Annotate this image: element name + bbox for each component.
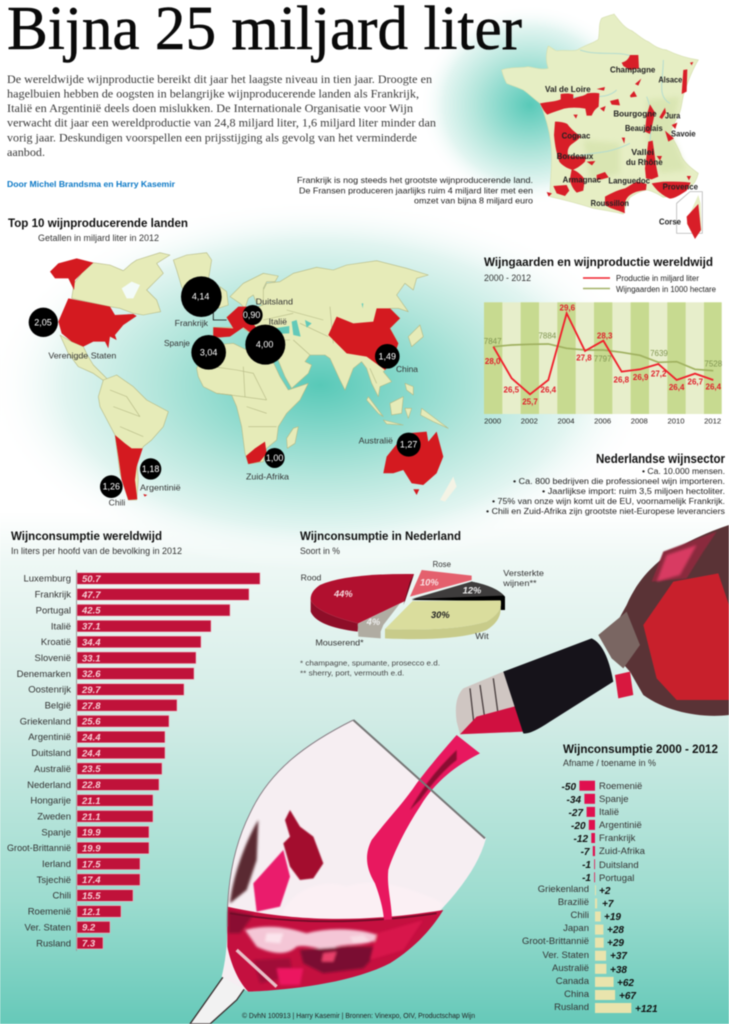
bar chart: world consumption: 47.7 [81,590,101,601]
line chart [484,302,723,425]
bar chart: consumption change: Portugal [599,873,634,884]
intro text: De wereldwijde wijnproductie bereikt dit jaar het laagste niveau in tien jaar. Droogte en [7,73,432,86]
stream [367,735,480,920]
panel: Nederlandse wijnsector: • Chili en Zuid-Afrika zijn grootste niet-Europese leveranciers [486,506,725,516]
panel: Nederlandse wijnsector: • Ca. 10.000 mensen. [642,466,725,476]
heading: line chart [484,255,713,283]
slice labels: Wit [475,631,489,641]
France map glow [420,5,640,205]
bar chart: world consumption: Zweden [37,812,71,822]
bubble: Verenigde Staten: 2,05 [34,317,52,327]
year axis: 2006 [594,416,611,425]
world map glow [0,200,650,570]
bubble: Duitsland [243,305,263,325]
intro text [7,73,436,159]
wine regions [540,55,701,239]
bar chart: consumption change: -27 [569,808,583,819]
foil capsule [503,638,613,733]
bar chart: world consumption: Griekenland [20,716,71,727]
bar chart: world consumption: Oostenrijk [28,685,71,696]
bar chart: world consumption: 42.5 [81,606,101,617]
heading: consumption change: Wijnconsumptie 2000 - 2012 [563,742,718,756]
bar chart: world consumption: 22.8 [81,780,101,791]
highlights [652,532,717,582]
region labels: Alsace [658,75,682,85]
bar chart: world consumption: 17.4 [82,875,101,886]
vineyard values: 7797 [594,354,612,363]
bar chart: world consumption: 17.5 [82,859,101,870]
bar chart: world consumption: 19.9 [82,828,101,839]
region labels: Corse [659,217,681,227]
illustration: wine bottle [456,525,729,734]
bar chart: consumption change: +2 [599,886,611,897]
vineyard values: 7847 [484,337,502,346]
bar chart: world consumption: Tsjechië [37,875,71,886]
bar chart: world consumption: 21.1 [81,812,100,823]
region labels: Roussillon [591,198,629,208]
producer countries [50,258,443,500]
bar chart: consumption change: Argentinië [599,820,642,831]
bar chart: consumption change: +67 [619,991,636,1002]
vineyard values [484,332,723,369]
region labels: Savoie [671,129,696,139]
bar chart: consumption change: -50 [562,782,576,793]
country labels: China [396,364,418,374]
bar chart: world consumption: 27.8 [81,701,101,712]
bar chart: consumption change: +19 [604,912,621,923]
slice: rood [311,574,414,632]
percentages [333,578,482,627]
bar chart: world consumption: Portugal [36,605,71,616]
production values: 26,4 [706,382,722,391]
production values: 28,0 [485,357,501,366]
production values: 28,3 [597,331,613,340]
intro text: vorig jaar. Deskundigen voorspellen een prijsstijging als gevolg van het verminderde [7,131,417,144]
bar chart: consumption change: Duitsland [599,860,639,871]
bar chart: consumption change: Roemenië [599,781,642,792]
bubble: Italië [245,325,285,365]
bar chart: world consumption: 24.4 [81,748,101,759]
bar chart: consumption change: +37 [610,951,627,962]
slice labels: Rood [301,572,322,582]
terrain shading [583,97,687,180]
bubble: China [375,344,400,369]
production values: 27,8 [576,354,592,363]
bar chart: consumption change: -12 [574,834,588,845]
bar chart: world consumption: 33.1 [82,653,100,664]
production values: 26,4 [669,383,685,392]
bar chart: consumption change: Groot-Brittannië [522,936,589,947]
bar chart: consumption change: Japan [563,923,589,934]
region labels: Cognac [562,130,590,140]
footnotes: * champagne, spumante, prosecco e.d. [300,658,440,667]
splash [253,850,290,912]
production line [493,313,713,394]
bar chart: world consumption: 32.6 [82,669,101,680]
bubble: Spanje [191,335,226,370]
region labels: Languedoc [608,176,650,186]
slice: wit [385,600,501,639]
bubble: Australië: 1,27 [400,440,417,450]
bar chart: world consumption: Italië [51,621,71,632]
bowl [222,720,486,992]
region labels: Beaujolais [625,123,663,133]
panel: Nederlandse wijnsector: • Jaarlijkse import: ruim 3,5 miljoen hectoliter. [542,486,725,496]
country labels: Australië [359,435,393,445]
heading: line chart: 2000 - 2012 [484,273,531,283]
France note [297,175,533,206]
bar chart: world consumption: België [45,700,71,712]
bar chart: consumption change: -20 [571,821,586,832]
bar chart: consumption change: +29 [607,938,624,949]
bubble: Chili: 1,26 [103,482,120,492]
country labels: Duitsland [256,296,293,306]
bar chart: consumption change: -1 [582,860,591,871]
bar chart: consumption change: +62 [617,978,634,989]
production values: 26,8 [614,375,630,384]
footnotes: ** sherry, port, vermouth e.d. [300,668,404,677]
bar chart: consumption change: Italië [599,807,619,818]
region labels: Vallei [631,147,654,157]
production values: 29,6 [560,304,576,313]
region labels: Champagne [610,65,655,75]
bar chart: consumption change: Rusland [554,1002,589,1013]
country labels: Zuid-Afrika [246,471,289,481]
line chart legend: Wijngaarden in 1000 hectare [616,285,717,294]
bar chart: world consumption: Duitsland [31,748,71,759]
percentages: 10% [420,578,439,588]
panel: Nederlandse wijnsector [486,452,725,516]
heading: line chart: Wijngaarden en wijnproductie wereldwijd [484,255,713,269]
Corsica inset [677,192,702,233]
bar chart: world consumption: Spanje [41,827,71,838]
land masses [60,253,457,502]
heading: world consumption: Wijnconsumptie wereldwijd [11,529,162,543]
heading: top 10: Getallen in miljard liter in 2012 [38,233,159,243]
heading: consumption change: Afname / toename in % [563,758,656,768]
slice labels: wijnen** [502,578,537,588]
heading: consumption in NL: Wijnconsumptie in Nederland [300,529,461,543]
France outline [502,14,698,214]
country labels: Chili [109,497,125,507]
vineyard values: 7639 [650,349,668,358]
bubble: Australië [397,433,421,457]
production values: 26,4 [541,385,557,394]
bar chart: consumption change [522,781,658,1015]
bubble: Frankrijk: 4,14 [192,291,209,301]
bar chart: world consumption: Ierland [42,859,71,870]
panel: Nederlandse wijnsector: • 75% van onze wijn komt uit de EU, voornamelijk Frankrijk. [492,496,725,506]
region labels: Bourgogne [613,109,657,119]
region labels: Armagnac [563,174,601,184]
country labels: Spanje [164,338,190,348]
France note: De Fransen produceren jaarlijks ruim 4 miljard liter met een [299,185,533,195]
heading: consumption in NL: Soort in % [300,546,340,556]
bar chart: world consumption: Australië [34,764,71,775]
wine [227,810,443,992]
bar chart: consumption change: Zuid-Afrika [599,846,646,857]
production values [485,304,722,406]
bar chart: world consumption: 50.7 [82,574,101,585]
heading: top 10: Top 10 wijnproducerende landen [8,216,188,230]
bar chart: consumption change: Canada [556,976,590,987]
region labels: Val de Loire [545,84,591,94]
stem [190,977,248,1024]
percentages: 4% [366,617,381,627]
country labels: Verenigde Staten [48,351,117,361]
bar chart: world consumption: Chili [53,891,71,902]
country labels: Argentinië [140,483,181,493]
bar chart: consumption change: -1 [582,873,591,884]
interior borders [110,307,377,437]
bar chart: world consumption: Ver. Staten [25,922,71,933]
bubble: Duitsland: 0,90 [243,310,260,320]
bubble: Spanje: 3,04 [200,347,217,357]
year axis: 2012 [704,416,721,425]
bar chart: world consumption: Denemarken [17,669,71,680]
credit line: © DvhN 100913 | Harry Kasemir | Bronnen: Vinexpo, OIV, Productschap Wijn [242,1011,475,1020]
region labels: Bordeaux [557,151,593,161]
seas [274,303,363,337]
intro text: hagelbuien hebben de oogsten in belangrijke wijnproducerende landen als Frankrijk, [7,88,419,101]
bar chart: world consumption: 15.5 [82,891,101,902]
bar chart: world consumption: 12.1 [82,907,100,918]
line chart legend: Productie in miljard liter [616,274,699,283]
production values: 25,7 [522,397,538,406]
heading: consumption in NL [300,529,461,556]
bubble: Verenigde Staten [29,308,58,337]
bar chart: world consumption: 24.4 [81,732,101,744]
slice: mouserend [358,603,400,638]
vineyard values: 7884 [538,332,557,341]
percentages: 44% [333,589,353,599]
slice: versterkte wijnen [412,582,505,610]
bar chart: world consumption: 29.7 [81,685,101,696]
wine in neck [615,672,633,698]
byline: Door Michel Brandsma en Harry Kasemir [7,179,176,189]
year axis: 2004 [557,416,575,425]
bar chart: world consumption: 19.9 [82,844,101,854]
region labels: Provence [663,182,698,192]
panel: Nederlandse wijnsector: • Ca. 800 bedrijven die professioneel wijn importeren. [513,476,725,486]
bar chart: consumption change: Ver. Staten [543,950,589,961]
heading: top 10 [8,216,188,243]
year axis: 2010 [667,416,685,425]
bubble: Argentinië: 1,18 [142,464,159,474]
neck glass [598,612,640,668]
France note: Frankrijk is nog steeds het grootste wijnproducerende land. [297,175,533,185]
heading: world consumption: In liters per hoofd van de bevolking in 2012 [11,546,182,556]
year axis [484,416,721,425]
bar chart: consumption change: Frankrijk [599,833,636,844]
production values: 26,7 [688,378,704,387]
bar chart: world consumption: Hongarije [30,796,71,807]
bar chart: world consumption: Nederland [27,780,71,791]
region labels: Jura [665,110,680,120]
Hudson Bay [122,282,140,298]
bottle body [610,525,729,716]
bar chart: world consumption: 37.1 [82,622,100,633]
pie chart: NL consumption [300,559,544,677]
bar chart: world consumption: Roemenië [28,907,71,918]
foam [283,883,443,922]
slice: rose [410,570,472,597]
bar chart: consumption change: -34 [567,795,581,806]
bar chart: world consumption: 25.6 [81,717,101,728]
bubble: Frankrijk [181,276,222,317]
bar chart: world consumption: 7.3 [82,939,96,950]
heading: consumption change [563,742,718,768]
bar chart: world consumption: 9.2 [82,923,96,934]
rim [353,720,485,838]
Corsica [687,195,702,238]
bubble: Italië: 4,00 [256,340,273,350]
percentages: 12% [463,586,482,596]
bar chart: world consumption: Luxemburg [23,574,71,585]
slice labels: Mouserend* [315,638,364,648]
production values: 27,2 [651,370,667,379]
year axis: 2008 [631,416,648,425]
production values: 26,9 [633,373,649,382]
heading: world consumption [11,529,182,556]
bar chart: world consumption: Frankrijk [35,590,71,601]
year axis: 2002 [521,416,538,425]
intro text: aanbod. [7,146,45,159]
bubble: Chili [100,475,123,498]
bar chart: consumption change: Brazilië [558,897,589,908]
country labels: Frankrijk [175,318,209,328]
bar chart: consumption change: Chili [571,910,589,921]
vineyards line [493,344,713,371]
map: France wine regions [502,14,702,239]
bar chart: world consumption: 21.1 [81,796,100,807]
bar chart: consumption change: +38 [610,965,627,976]
bar chart: world consumption: 34.4 [82,637,101,648]
intro text: verwacht dit jaar een wereldproductie van 24,8 miljard liter, 1,6 miljard liter minder dan [7,117,436,130]
bar chart: world consumption: Argentinië [28,732,71,743]
country labels: Italië [269,317,287,327]
footnotes [300,658,440,677]
slice labels: Versterkte [503,568,544,578]
bar chart: world consumption: Groot-Brittannië [7,843,71,854]
region labels: du Rhône [626,157,663,167]
line chart legend [583,274,717,294]
region labels [545,65,698,227]
bubble: Argentinië [140,458,161,480]
bar chart: world consumption [7,570,260,951]
slice labels [301,559,544,648]
vineyard values: 7528 [704,360,723,369]
leader line [213,310,227,320]
bubble: China: 1,49 [379,351,396,361]
intro text: Italië en Argentinië deels doen mislukken. De Internationale Organisatie voor Wijn [7,102,413,115]
France note: omzet van bijna 8 miljard euro [414,196,533,206]
rivers [557,50,670,173]
bar chart: consumption change: Griekenland [538,884,589,895]
bar chart: world consumption: Slovenië [35,653,71,664]
bubble: Zuid-Afrika [265,448,285,468]
map: world producers [29,253,457,507]
bar chart: consumption change: -7 [581,847,590,858]
bubble: Zuid-Afrika: 1,00 [266,453,283,463]
bar chart: consumption change: Australië [552,963,589,974]
bottle mouth [456,672,523,734]
bar chart: world consumption: Rusland [36,938,71,949]
country labels [48,296,418,507]
bar chart: consumption change: +121 [635,1004,658,1015]
year axis: 2000 [484,416,501,425]
bar chart: world consumption: 23.5 [81,764,101,775]
bar chart: world consumption: Kroatië [41,637,71,648]
bar chart: consumption change: China [564,989,590,1000]
slice labels: Rose [433,559,451,569]
illustration: wine glass [190,720,486,1024]
bar chart: consumption change: +28 [607,925,624,936]
bar chart: consumption change: +7 [602,899,614,910]
bar chart: consumption change: Spanje [599,794,629,805]
production values: 26,5 [504,385,520,394]
percentages: 30% [431,610,450,620]
label [643,573,729,700]
